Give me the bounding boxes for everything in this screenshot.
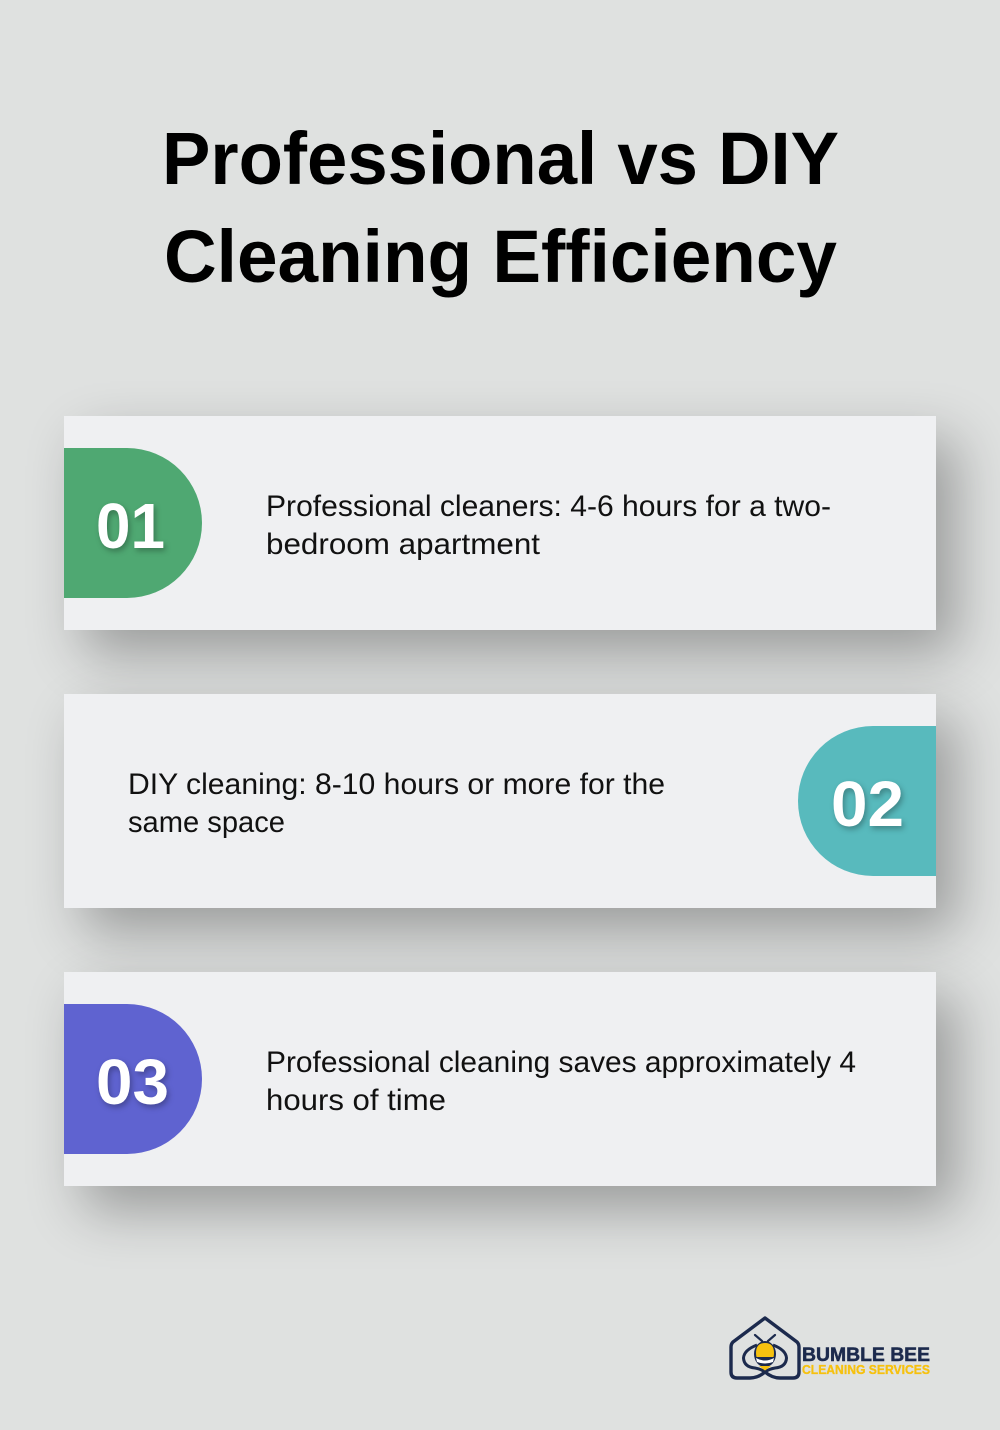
panel: step 01 xyxy=(64,416,936,630)
text: step 03: Professional cleaning saves approximately 4 xyxy=(266,1046,856,1079)
logo: Bumble Bee Cleaning Services: CLEANING SERVICES xyxy=(802,1363,930,1377)
text: step 02: same space xyxy=(128,806,285,839)
badge: 02 xyxy=(798,726,936,876)
badge: 02: 02 xyxy=(831,768,904,840)
panel: step 02 xyxy=(64,694,936,908)
logo: Bumble Bee Cleaning Services xyxy=(729,1316,930,1380)
panel: step 03 xyxy=(64,972,936,1186)
badge: 03 xyxy=(64,1004,202,1154)
icon: bee xyxy=(744,1335,786,1372)
title: Cleaning Efficiency xyxy=(164,215,837,298)
text: step 03: hours of time xyxy=(266,1084,446,1117)
text: step 02 xyxy=(128,768,665,839)
text: step 03 xyxy=(266,1046,856,1117)
title: Professional vs DIY xyxy=(162,117,839,200)
logo text: BUMBLE BEE xyxy=(802,1344,930,1366)
badge: 01 xyxy=(64,448,202,598)
text: step 01: Professional cleaners: 4-6 hours for a two- xyxy=(266,490,831,523)
text: step 01: bedroom apartment xyxy=(266,528,541,561)
icon: house outline xyxy=(731,1318,799,1378)
text: step 02: DIY cleaning: 8-10 hours or more for the xyxy=(128,768,665,801)
text: step 01 xyxy=(266,490,831,561)
badge: 01: 01 xyxy=(96,490,165,562)
badge: 03: 03 xyxy=(96,1046,169,1118)
